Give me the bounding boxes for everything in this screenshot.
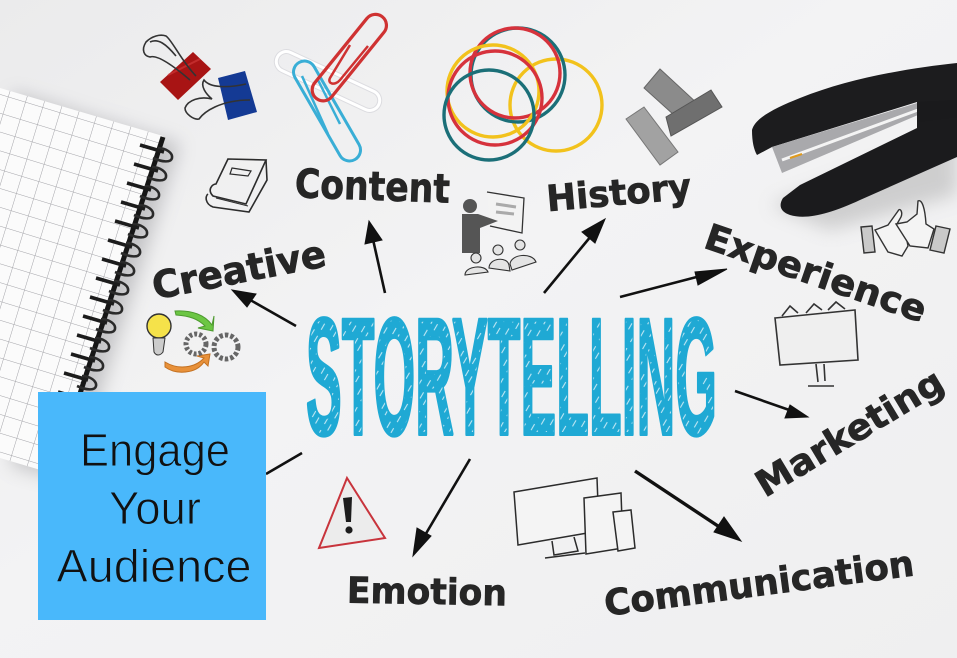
title: History: History (545, 167, 693, 220)
title: Communication: Communication (602, 544, 917, 625)
icon: book (206, 159, 267, 212)
title: Marketing: Marketing (749, 361, 951, 506)
paper clips (273, 10, 391, 165)
binder clips (143, 35, 257, 120)
rubber bands (444, 28, 602, 160)
callout: Engage Your Audience: Audience (56, 540, 252, 592)
callout: Engage Your Audience (38, 392, 266, 620)
staples (626, 69, 722, 165)
stapler (752, 63, 957, 230)
icon: billboard (775, 302, 858, 386)
icon: presenter (462, 192, 536, 275)
icon: thumbs up (861, 201, 950, 256)
callout: Engage Your Audience: Your (109, 482, 201, 534)
title: Experience: Experience (699, 217, 932, 331)
icon: devices (514, 478, 635, 558)
callout: Engage Your Audience: Engage (80, 424, 230, 476)
notebook (0, 88, 180, 482)
arrows (232, 219, 808, 556)
title: Content: Content (294, 161, 451, 213)
icon: light bulb and gears (147, 311, 238, 372)
title: Creative: Creative (148, 232, 330, 308)
icon: warning sign (319, 478, 385, 548)
title: Emotion: Emotion (347, 571, 507, 614)
